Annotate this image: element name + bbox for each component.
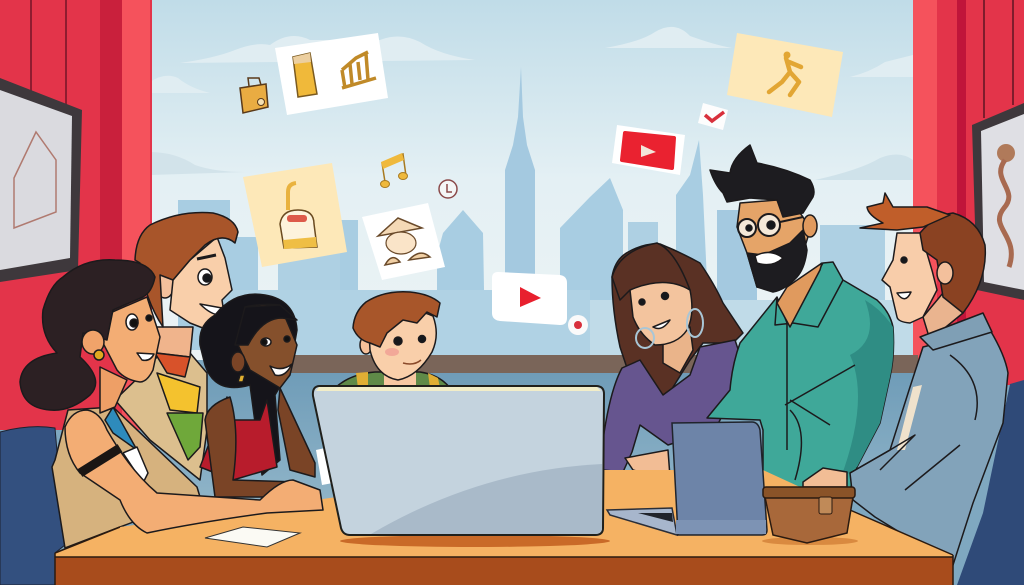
boy in the middle	[335, 292, 450, 388]
icon: music notes	[380, 153, 408, 188]
paper behind laptop	[316, 448, 333, 485]
arm band	[80, 448, 120, 473]
framed picture right	[972, 103, 1024, 300]
right red wall and curtain	[913, 0, 1024, 385]
icon: clock	[439, 180, 457, 198]
forearm on table	[65, 410, 323, 533]
big laptop	[313, 386, 604, 535]
floating card: chart icons	[275, 33, 388, 115]
floating card: lamp	[243, 163, 347, 267]
floating card: house figures	[362, 203, 445, 280]
left red wall and curtain	[0, 0, 152, 430]
woman at far left	[20, 260, 200, 548]
man in teal shirt	[707, 145, 894, 490]
man at right in blue-grey shirt	[803, 193, 1008, 565]
clouds	[150, 27, 913, 180]
laptop shadow	[340, 535, 610, 547]
city skyline	[178, 67, 920, 355]
record dot	[568, 315, 588, 335]
window sky	[140, 0, 930, 360]
tall man in tan jacket	[115, 212, 238, 480]
basket	[762, 487, 858, 545]
icon: radio bag	[240, 78, 268, 113]
floating card: walking figure	[727, 33, 843, 117]
woman with hoops	[603, 243, 745, 477]
play card bottom	[492, 272, 567, 325]
framed picture left	[0, 78, 82, 282]
wall below the window	[150, 372, 950, 502]
notepad	[205, 527, 300, 547]
play card top	[612, 125, 685, 175]
table	[55, 470, 953, 585]
small laptop	[607, 422, 767, 535]
right chair	[957, 380, 1024, 585]
left chair	[0, 427, 65, 585]
window sill	[285, 355, 918, 373]
woman in red top	[200, 294, 315, 497]
small check card	[698, 103, 728, 130]
